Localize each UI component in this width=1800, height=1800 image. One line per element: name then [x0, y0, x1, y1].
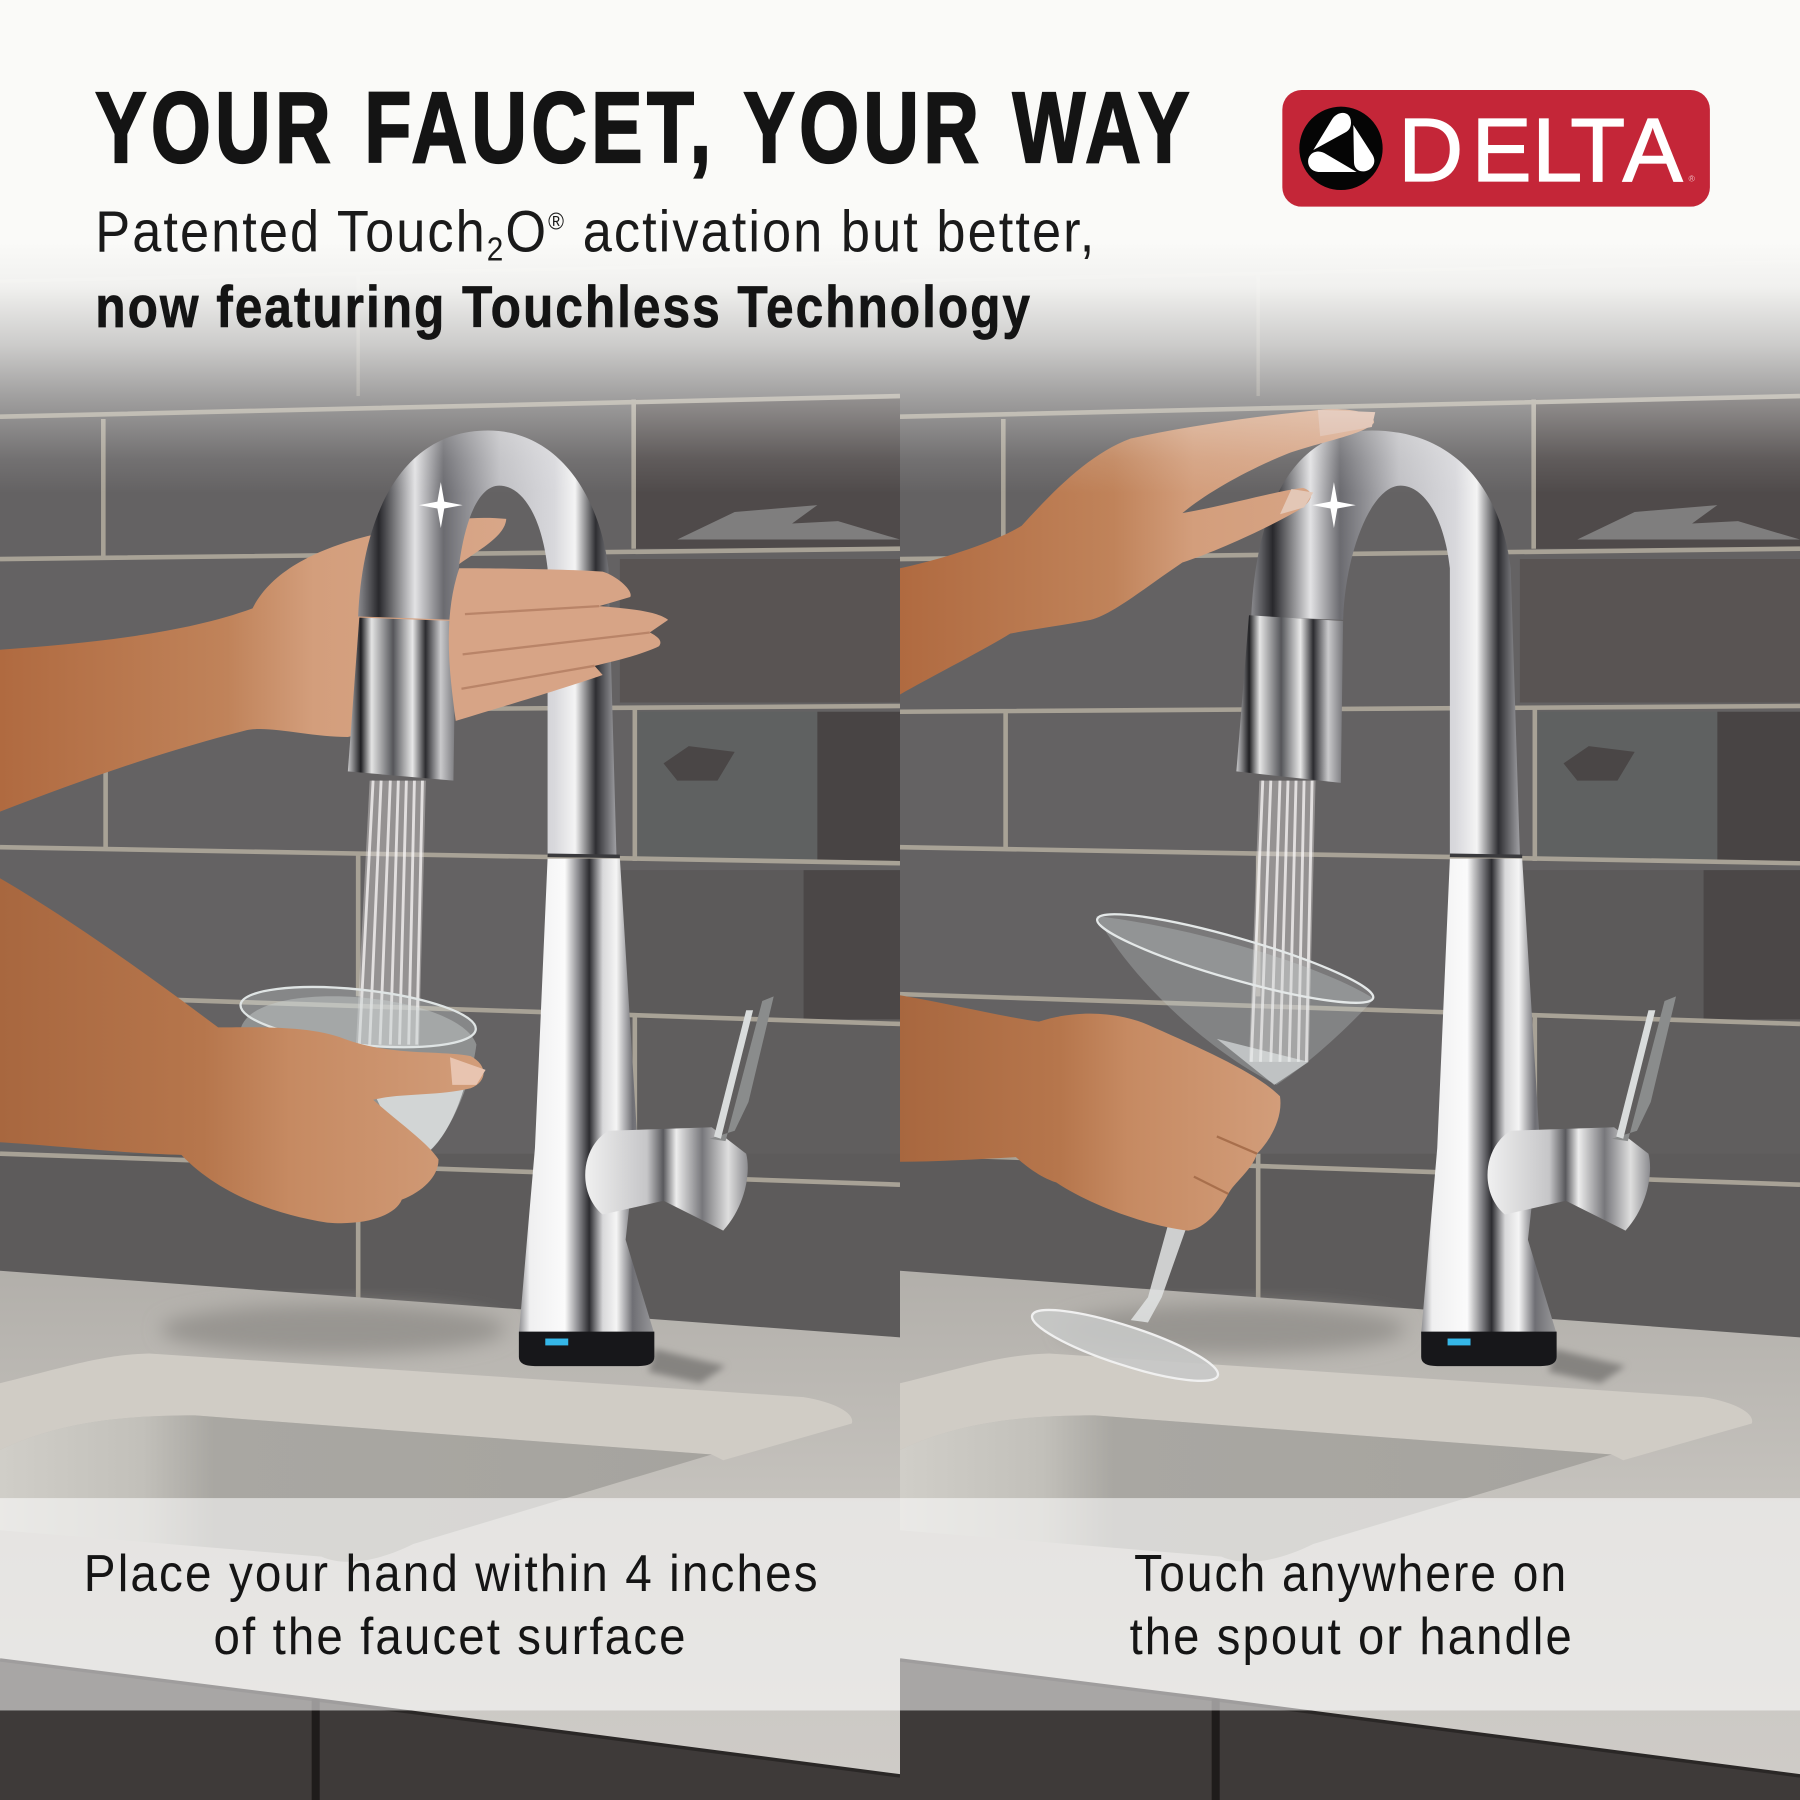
hand touching the spout	[900, 409, 1375, 695]
panel: right photo	[900, 282, 1800, 1800]
panel: left photo	[0, 282, 900, 1800]
subtitle line two: now featuring Touchless Technology	[95, 275, 1032, 340]
tile wall and countertop	[900, 282, 1800, 1800]
subtitle line one: ®	[548, 209, 566, 236]
faucet lower body and handle	[519, 855, 774, 1366]
faucet spout left	[358, 430, 616, 855]
tile wall and countertop	[0, 282, 900, 1800]
logo badge	[1282, 90, 1710, 207]
subtitle line one: Patented Touch	[95, 199, 533, 264]
subtitle line one: activation but better,	[566, 199, 1096, 264]
fingers in front of spout	[449, 568, 668, 721]
water stream	[356, 781, 426, 1047]
logo wordmark: DELTA	[1398, 101, 1683, 201]
arm behind spout	[0, 518, 506, 812]
martini glass	[1026, 899, 1379, 1394]
highlight star	[419, 482, 463, 528]
caption left line two: of the faucet surface	[214, 1607, 688, 1665]
caption band	[0, 1498, 1800, 1710]
title: YOUR FAUCET, YOUR WAY	[95, 73, 1194, 184]
subtitle line one: 2	[487, 232, 505, 269]
logo: Delta	[1282, 90, 1710, 207]
faucet spray head right	[1236, 615, 1343, 783]
caption: left	[84, 1544, 820, 1665]
hand holding glass	[900, 995, 1280, 1231]
caption left line one: Place your hand within 4 inches	[84, 1544, 820, 1602]
registered mark: ®	[1689, 173, 1696, 183]
logo emblem	[1299, 107, 1383, 190]
caption: right	[1130, 1544, 1574, 1665]
right water stream	[1249, 781, 1316, 1062]
faucet spray head	[348, 618, 456, 781]
forearm and hand holding bowl	[0, 878, 486, 1223]
faucet lower body and handle right	[1421, 855, 1676, 1366]
faucet spout right	[1251, 430, 1520, 855]
highlight star right	[1312, 482, 1356, 528]
subtitle line one: O	[505, 199, 548, 264]
caption right line two: the spout or handle	[1130, 1607, 1574, 1665]
caption right line one: Touch anywhere on	[1134, 1544, 1568, 1602]
glass bowl	[238, 977, 479, 1156]
top fade	[0, 0, 1800, 494]
